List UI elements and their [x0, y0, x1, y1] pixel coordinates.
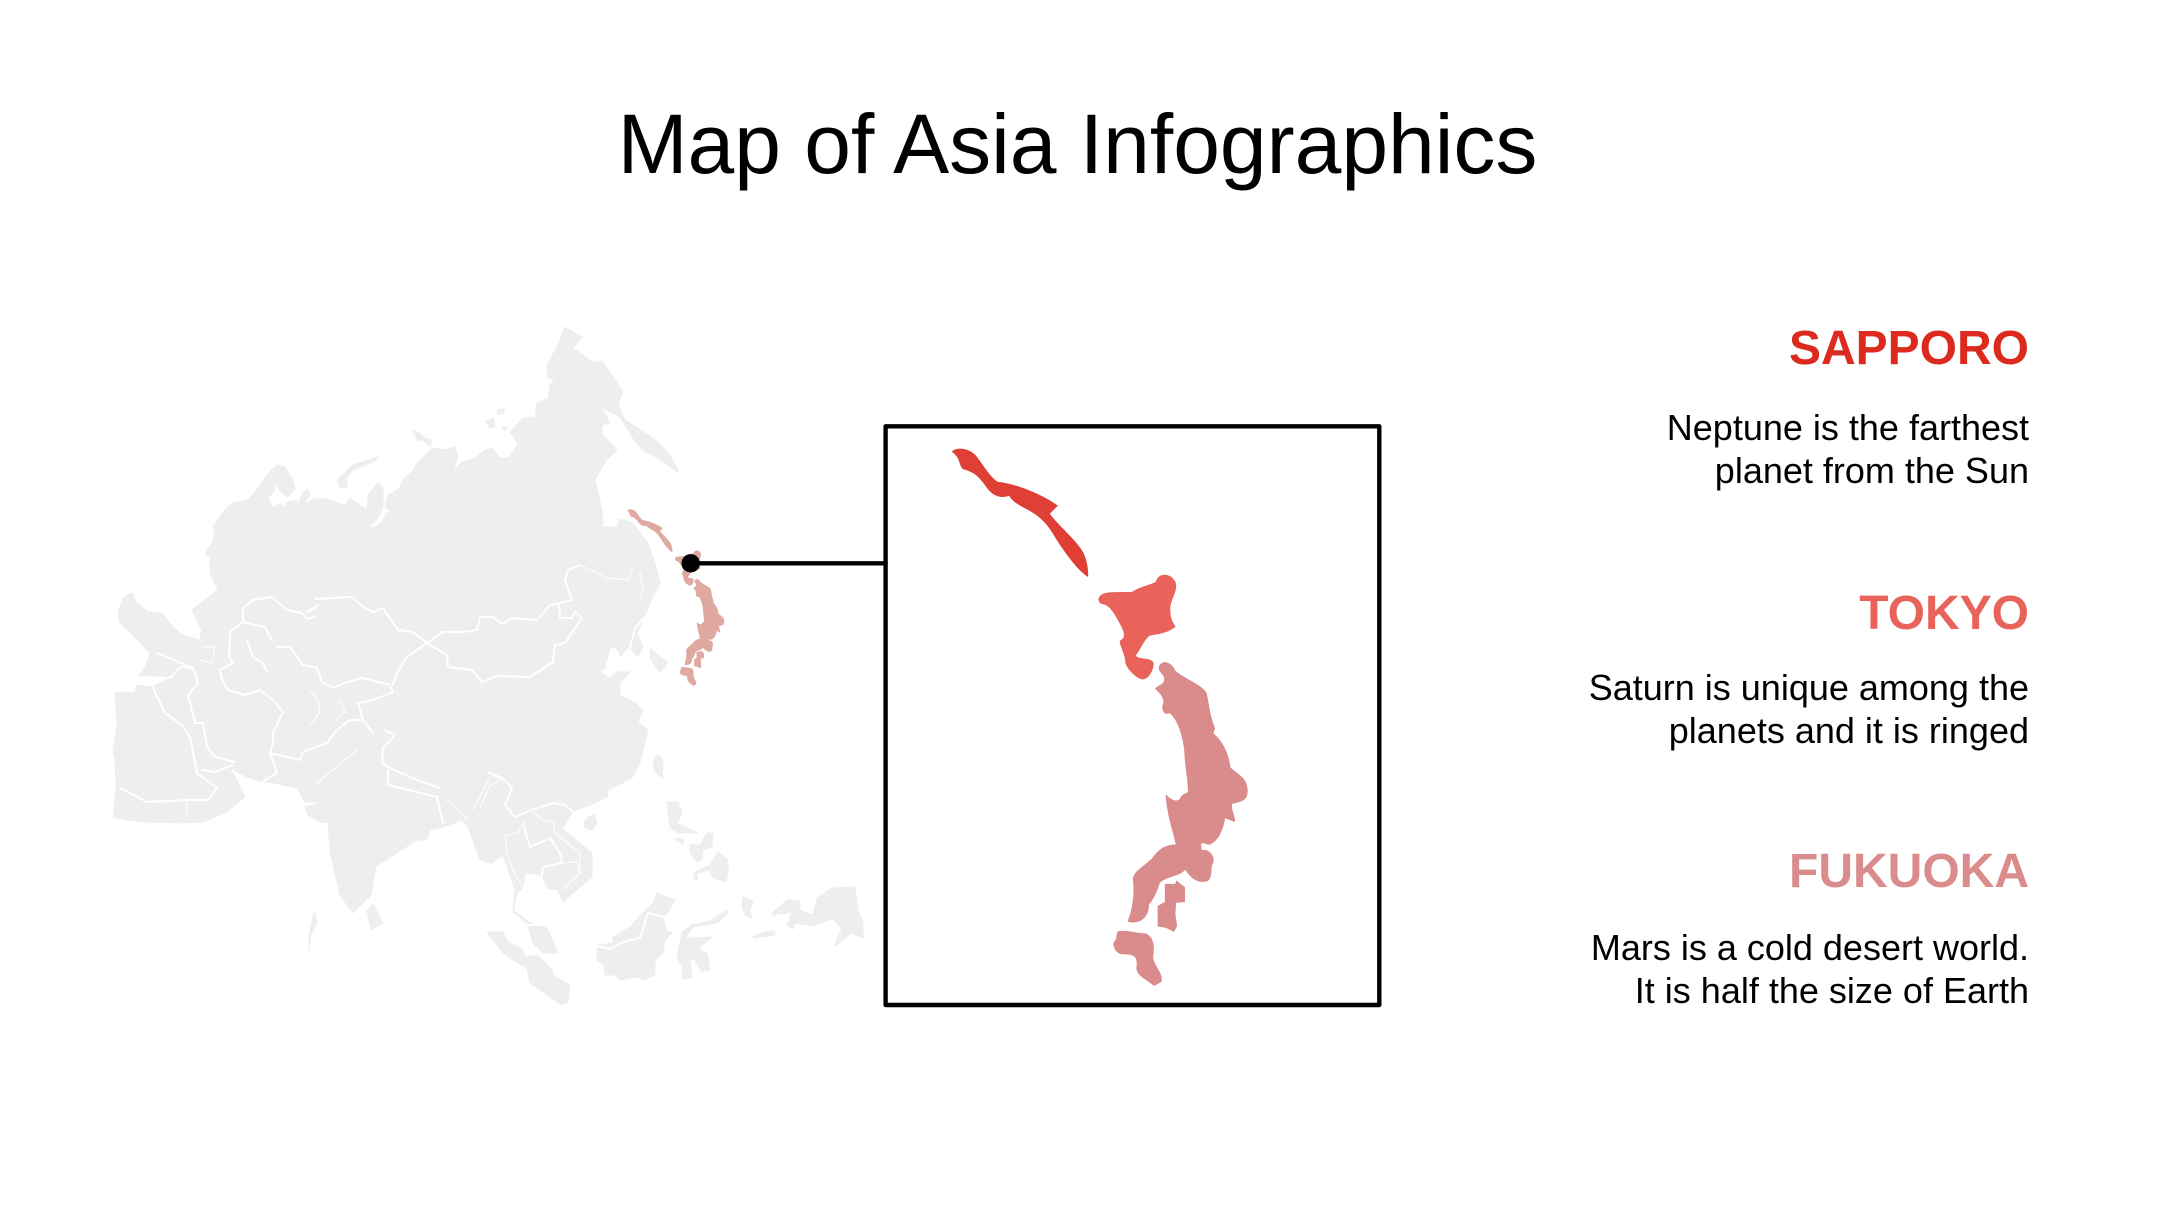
title: Map of Asia Infographics: [618, 97, 1537, 191]
connector line and location dot: [682, 554, 886, 572]
heading: Sapporo: SAPPORO: [1789, 322, 2029, 375]
description: Sapporo: planet from the Sun: [1715, 450, 2029, 491]
region: Fukuoka (Honshu, Shikoku, Kyushu): [1114, 663, 1247, 985]
islands: [309, 408, 863, 1005]
heading: Tokyo: TOKYO: [1859, 587, 2029, 640]
description: Tokyo: [1589, 667, 2029, 751]
description: Sapporo: Neptune is the farthest: [1667, 407, 2029, 448]
description: Sapporo: [1667, 407, 2029, 491]
text block: Sapporo: [1667, 322, 2029, 491]
description: Fukuoka: It is half the size of Earth: [1635, 970, 2029, 1011]
region: Tokyo (Hokkaido): [1099, 575, 1176, 679]
region: Sapporo (Sakhalin): [953, 449, 1088, 576]
inset frame: [886, 426, 1379, 1005]
highlighted Japan on the map: [628, 510, 724, 685]
description: Fukuoka: Mars is a cold desert world.: [1591, 927, 2029, 968]
description: Tokyo: planets and it is ringed: [1669, 710, 2029, 751]
description: Tokyo: Saturn is unique among the: [1589, 667, 2029, 708]
text block: Fukuoka: [1591, 845, 2029, 1011]
heading: Fukuoka: FUKUOKA: [1789, 845, 2029, 898]
map of Asia: [113, 327, 863, 1005]
country borders: [120, 565, 663, 949]
description: Fukuoka: [1591, 927, 2029, 1011]
inset Japan regions: [953, 449, 1247, 985]
mainland Asia: [113, 327, 679, 953]
text block: Tokyo: [1589, 587, 2029, 751]
inset panel: Japan close-up: [886, 426, 1379, 1005]
